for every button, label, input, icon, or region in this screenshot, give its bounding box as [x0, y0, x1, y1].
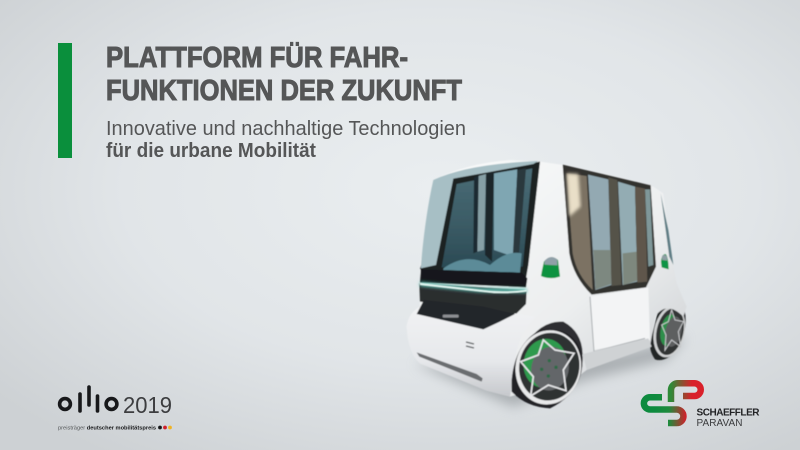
subtitle	[106, 118, 466, 162]
LED light strip	[420, 284, 527, 292]
door seam	[590, 297, 645, 352]
glass reflections	[494, 169, 517, 257]
light strip glow	[420, 284, 527, 291]
front vent	[417, 352, 483, 382]
rocker shadow	[583, 338, 652, 370]
lower side panel	[590, 287, 650, 350]
award caption: preisträger deutscher mobilitätspreis	[58, 426, 156, 432]
rear quarter window	[661, 193, 673, 265]
vehicle illustration	[407, 160, 690, 411]
title: PLATTFORM FÜR FAHR-	[106, 41, 408, 74]
nose panel	[407, 307, 535, 397]
badge	[443, 315, 459, 318]
logo mark	[644, 383, 701, 423]
subtitle: für die urbane Mobilität	[106, 140, 316, 162]
green accent bar	[58, 43, 72, 158]
colour dots	[158, 426, 172, 429]
windshield side glass	[421, 161, 538, 268]
title	[106, 41, 462, 107]
front black panel	[417, 300, 515, 329]
side mirror right	[661, 254, 669, 269]
windshield frame	[420, 162, 540, 284]
cowl	[420, 269, 527, 287]
title: FUNKTIONEN DER ZUKUNFT	[106, 75, 462, 107]
side windows	[563, 165, 656, 295]
subtitle: Innovative und nachhaltige Technologien	[106, 118, 466, 140]
ollo 2019 award logo	[58, 387, 172, 432]
white body shell	[407, 160, 687, 397]
front wheel	[509, 324, 588, 411]
front wheel arch	[513, 322, 583, 393]
Schaeffler Paravan logo	[644, 383, 760, 429]
windshield glass	[442, 168, 532, 267]
dark front band	[419, 283, 527, 315]
vehicle body and details	[407, 160, 690, 411]
side mirror left	[541, 257, 560, 278]
rear wheel	[649, 302, 690, 360]
ollo mark	[60, 387, 117, 411]
charging slots	[466, 342, 474, 348]
company name: SCHAEFFLER	[696, 408, 760, 418]
ground shadow	[413, 337, 687, 407]
company name second line: PARAVAN	[696, 418, 742, 429]
dashboard and seats	[443, 253, 522, 273]
year: 2019	[123, 392, 172, 418]
